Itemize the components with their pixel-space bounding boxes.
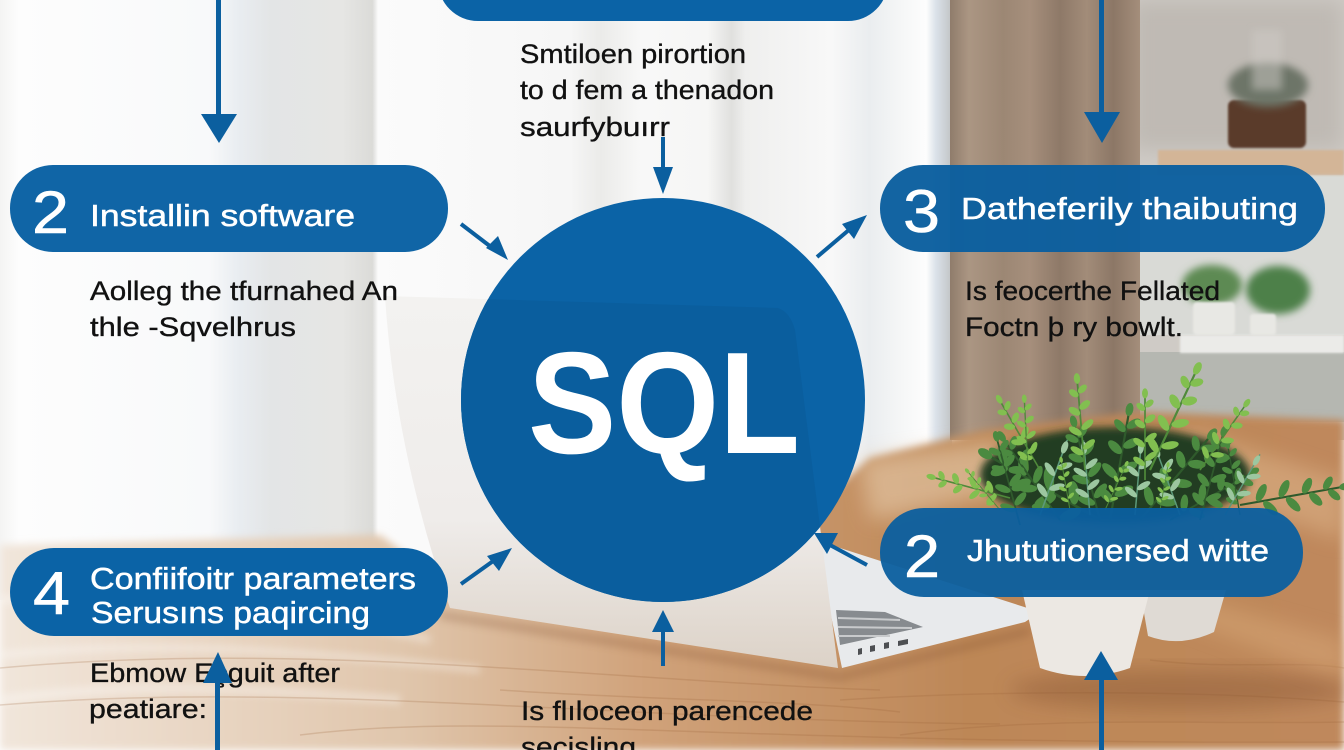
arrow: bottom-right up [1084, 651, 1118, 750]
step 3 description [965, 276, 1220, 342]
step 2 description: Aolleg the tfurnahed An [90, 276, 398, 306]
bottom text block: Is flıloceon parencede [521, 696, 813, 726]
step 2 description [90, 276, 398, 342]
arrow: lower-right to circle [814, 533, 867, 565]
arrow: top-left down [201, 0, 237, 143]
arrow: upper-left to circle [461, 224, 508, 260]
step 2 description: thle -Sqvelhrus [90, 312, 296, 342]
step 3 pill [880, 165, 1325, 252]
arrow: upper-right to circle [817, 215, 867, 257]
top text block [520, 39, 774, 142]
SQL label: SQL [528, 322, 800, 484]
background: wooden table [0, 412, 1344, 750]
step 3 pill: Datheferily thaibuting [961, 191, 1298, 226]
central SQL circle [461, 198, 865, 602]
arrow: bottom to circle [652, 610, 674, 666]
top text block: saurfybuırr [520, 112, 670, 142]
step 4 pill [10, 548, 448, 636]
step 2 pill: install software: 2 [32, 179, 69, 246]
plant pots [1022, 590, 1226, 676]
step 2b pill: Jhututionersed witte [967, 533, 1269, 568]
arrow: top-right down [1084, 0, 1120, 143]
arrow: bottom-left up [203, 652, 232, 750]
arrow: lower-left to circle [461, 548, 512, 584]
step 3 pill: 3 [903, 178, 940, 245]
step 4 description [89, 658, 340, 724]
step 4 pill: 4 [33, 560, 70, 627]
step 2 pill: install software: Installin software [90, 198, 355, 233]
step 4 pill: Confiifoitr parameters [90, 561, 416, 596]
plant foliage [923, 355, 1344, 540]
top text block: Smtiloen pirortion [520, 39, 746, 69]
laptop [385, 296, 1040, 668]
bottom text block [521, 696, 813, 750]
step 4 pill: Serusıns paqircing [91, 595, 370, 630]
step 4 description: peatiare: [89, 694, 207, 724]
step 3 description: Foctn þ ry bowlt. [965, 312, 1183, 342]
step 2 pill: install software [10, 165, 448, 252]
background: curtained window [0, 0, 952, 600]
arrow: top to circle [653, 137, 673, 194]
step 2b pill: 2 [904, 523, 940, 590]
step 3 description: Is feocerthe Fellated [965, 276, 1220, 306]
background: brown curtain [950, 0, 1140, 440]
top pill (cropped) [438, 0, 888, 21]
step 2b pill [880, 508, 1303, 597]
top text block: to d fem a thenadon [520, 75, 774, 105]
step 4 description: Ebmow Eçguit after [90, 658, 340, 688]
background: right wall and shelves [1130, 0, 1344, 440]
